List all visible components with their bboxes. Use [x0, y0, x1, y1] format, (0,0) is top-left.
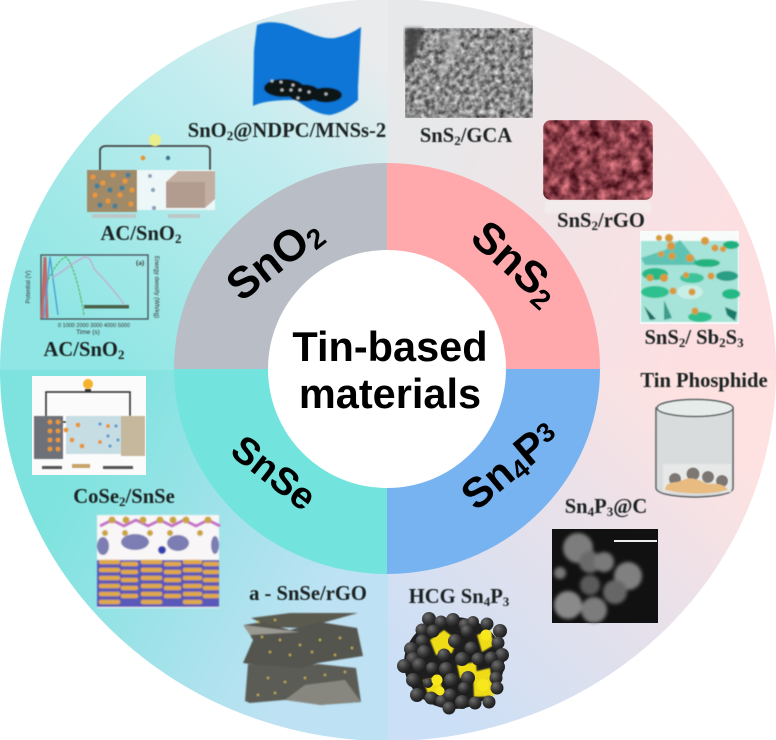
title: Tin-based materials: materials — [299, 370, 481, 417]
ring label: SnO2: 2 — [300, 222, 332, 256]
ring label: SnSe: SnSe — [223, 428, 324, 519]
label: SnS2/GCA: /GCA — [460, 125, 512, 147]
image: HCG Sn4P3 sphere cluster — [397, 612, 509, 714]
ring label: Sn4P3: P — [504, 421, 556, 475]
label: SnS2/Sb2S3: SnS — [644, 327, 679, 349]
ring label: Sn4P3: 4 — [505, 453, 536, 486]
image: Sn4P3@C micrograph — [552, 529, 658, 623]
ring label: Sn4P3: 3 — [530, 416, 561, 449]
label: SnS2/GCA: SnS — [420, 125, 454, 147]
label: SnS2/Sb2S3: / Sb — [684, 327, 719, 349]
label: CoSe2/SnSe: /SnSe — [125, 486, 175, 508]
label: SnS2/GCA: 2 — [454, 133, 461, 148]
label: SnO2@NDPC/MNSs-2: SnO — [188, 120, 227, 142]
icon: beaker with tin phosphide particles — [656, 400, 733, 497]
centre white circle — [268, 250, 506, 488]
ring label: SnO2: SnO — [217, 216, 319, 311]
label: SnS2/Sb2S3: 2 — [679, 335, 685, 350]
label: HCG Sn4P3: 4 — [484, 594, 491, 609]
image: SnS2/GCA micrograph — [405, 28, 533, 118]
label: SnS2/rGO: /rGO — [597, 210, 645, 232]
image: CoSe2/SnSe crystal structure — [97, 515, 220, 608]
label: Sn4P3@C: P — [594, 496, 607, 518]
image: a-SnSe/rGO graphene sheets — [243, 613, 363, 705]
label: CoSe2/SnSe: CoSe — [73, 486, 119, 508]
image: SnO2@NDPC/MNSs-2 blue sheet — [253, 22, 361, 115]
ring label: Sn4P3: Sn — [452, 448, 523, 519]
image: AC/SnO2 cell schematic — [87, 134, 215, 218]
label: SnO2@NDPC/MNSs-2: 2 — [227, 128, 233, 143]
image: CoSe2/SnSe battery schematic — [32, 376, 146, 475]
title: Tin-based materials — [292, 323, 488, 417]
ring label: SnS2: SnS — [462, 211, 558, 305]
ring segment: SnS2 — [387, 163, 600, 369]
title: Tin-based materials: Tin-based — [292, 323, 488, 370]
label: SnO2@NDPC/MNSs-2: @NDPC/MNSs-2 — [233, 120, 386, 142]
chart: AC/SnO2 potential vs time: Time (s) — [76, 329, 100, 336]
ring label: SnS2: 2 — [525, 283, 557, 316]
label: Tin Phosphide: Tin Phosphide — [640, 370, 768, 392]
label: Sn4P3@C: 4 — [588, 504, 595, 519]
label: HCG Sn4P3: P — [490, 586, 503, 608]
chart: AC/SnO2 potential vs time: (a) — [136, 259, 145, 267]
image: SnS2/rGO micrograph — [543, 120, 653, 213]
ring segment: SnSe — [174, 369, 387, 574]
chart: AC/SnO2 potential vs time: Energy density (Wh/kg) — [153, 256, 159, 318]
label: HCG Sn4P3: 3 — [503, 594, 510, 609]
label: a-SnSe/rGO: a - SnSe/rGO — [249, 583, 367, 605]
ring segment: SnO2 — [174, 163, 387, 369]
label: SnS2/rGO: 2 — [591, 218, 598, 233]
chart: AC/SnO2 potential vs time — [26, 255, 159, 336]
label: CoSe2/SnSe: 2 — [119, 494, 126, 509]
label: SnS2/Sb2S3: S — [726, 327, 737, 349]
label: HCG Sn4P3: HCG Sn — [409, 586, 484, 608]
label: AC/SnO2 (chart): AC/SnO — [44, 339, 118, 361]
chart: AC/SnO2 potential vs time: Potential (V) — [26, 270, 32, 304]
label: AC/SnO2 (chart): 2 — [118, 347, 124, 362]
label: AC/SnO2 (schematic): AC/SnO — [101, 223, 175, 245]
label: AC/SnO2 (schematic): 2 — [175, 231, 181, 246]
label: SnS2/Sb2S3: 2 — [719, 335, 726, 350]
ring segment: Sn4P3 — [387, 369, 600, 574]
label: Sn4P3@C: @C — [613, 496, 647, 518]
label: Sn4P3@C: 3 — [607, 504, 614, 519]
label: Sn4P3@C: Sn — [565, 496, 588, 518]
label: SnS2/rGO: SnS — [557, 210, 591, 232]
label: SnS2/Sb2S3: 3 — [737, 335, 744, 350]
chart: AC/SnO2 potential vs time: 0 1000 2000 3000 4000 5000 — [58, 323, 130, 329]
image: SnS2/Sb2S3 sheets with particles — [640, 231, 740, 324]
